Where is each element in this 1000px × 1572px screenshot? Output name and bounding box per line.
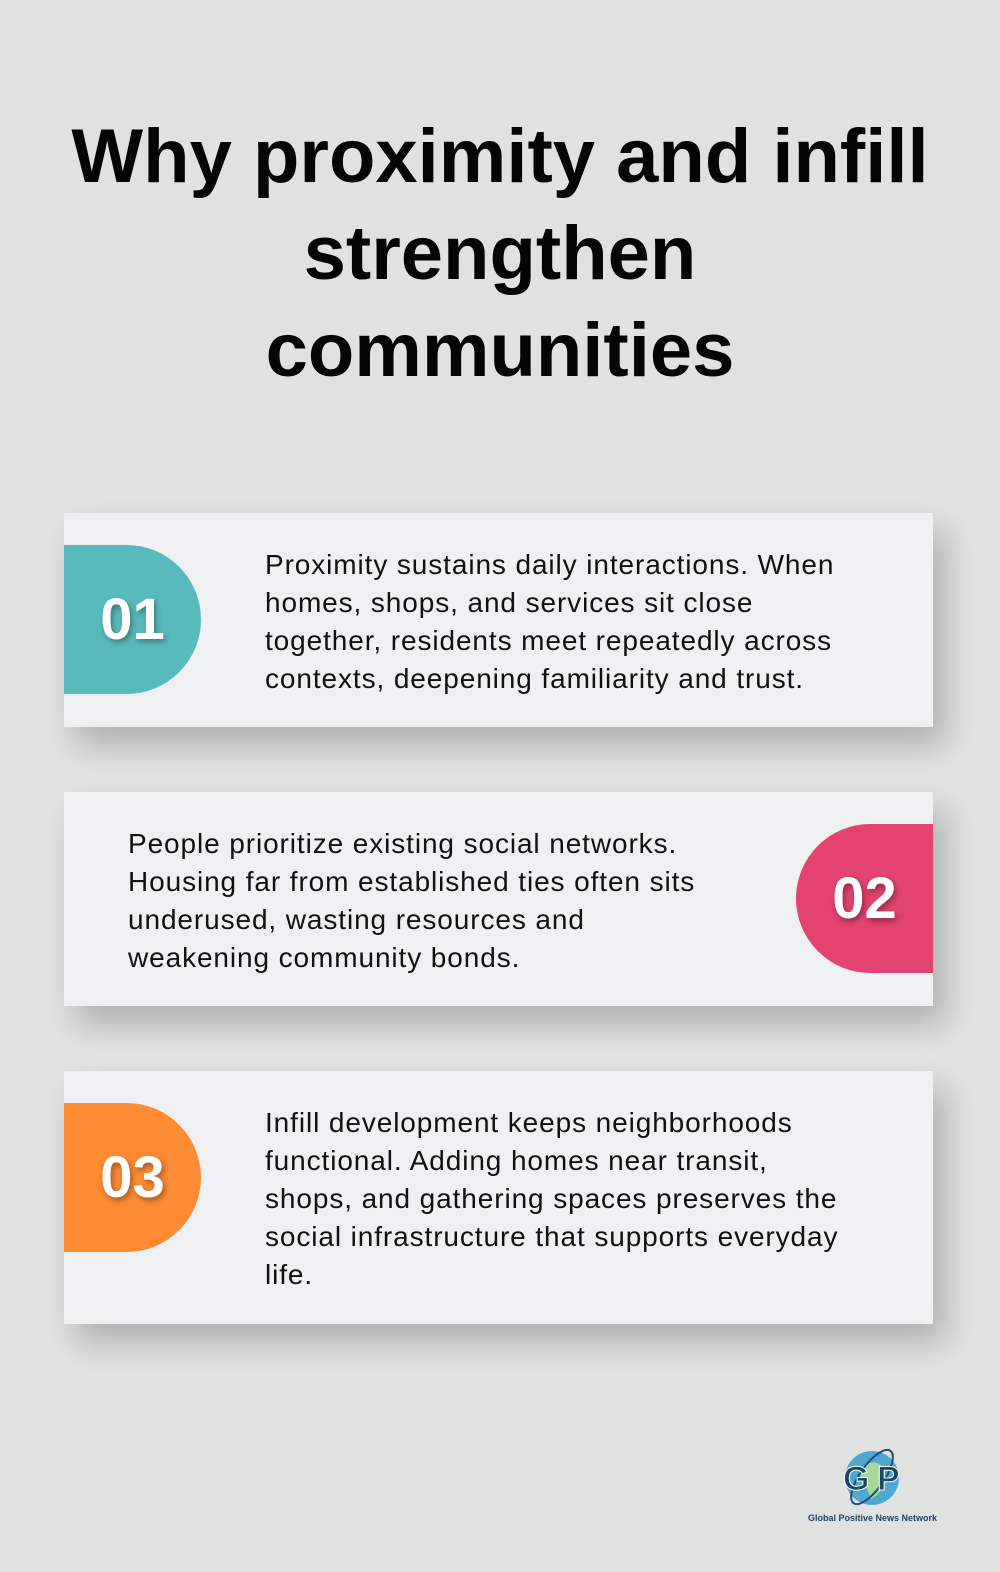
logo: Global Positive News Network (808, 1513, 937, 1523)
badge 01 (64, 545, 201, 694)
icon: globe: P (877, 1460, 900, 1498)
title: Why proximity and infill (71, 114, 929, 199)
text 02 (128, 828, 695, 973)
title: communities (266, 308, 734, 393)
text 03: Infill development keeps neighborhoods (265, 1107, 793, 1138)
text 01: Proximity sustains daily interactions. When (265, 549, 834, 580)
icon: globe (843, 1444, 900, 1510)
text 03: shops, and gathering spaces preserves the (265, 1183, 837, 1214)
title (71, 114, 929, 393)
badge 02 (796, 824, 933, 973)
icon: globe: G (843, 1460, 869, 1498)
badge 02: 02 (832, 866, 897, 931)
badge 01: 01 (100, 587, 165, 652)
panel: card 03 (64, 1071, 933, 1324)
text 01: contexts, deepening familiarity and trust. (265, 663, 804, 694)
panel: card 02 (64, 792, 933, 1006)
text 03 (265, 1107, 838, 1290)
text 01 (265, 549, 834, 694)
badge 03 (64, 1103, 201, 1252)
text 03: functional. Adding homes near transit, (265, 1145, 768, 1176)
text 03: life. (265, 1259, 313, 1290)
text 02: Housing far from established ties often sits (128, 866, 695, 897)
text 02: underused, wasting resources and (128, 904, 585, 935)
text 02: People prioritize existing social networks. (128, 828, 677, 859)
title: strengthen (304, 211, 696, 296)
badge 03: 03 (100, 1145, 165, 1210)
logo (808, 1448, 937, 1523)
text 02: weakening community bonds. (128, 942, 520, 973)
text 01: homes, shops, and services sit close (265, 587, 753, 618)
text 01: together, residents meet repeatedly across (265, 625, 832, 656)
text 03: social infrastructure that supports everyday (265, 1221, 838, 1252)
panel: card 01 (64, 513, 933, 727)
